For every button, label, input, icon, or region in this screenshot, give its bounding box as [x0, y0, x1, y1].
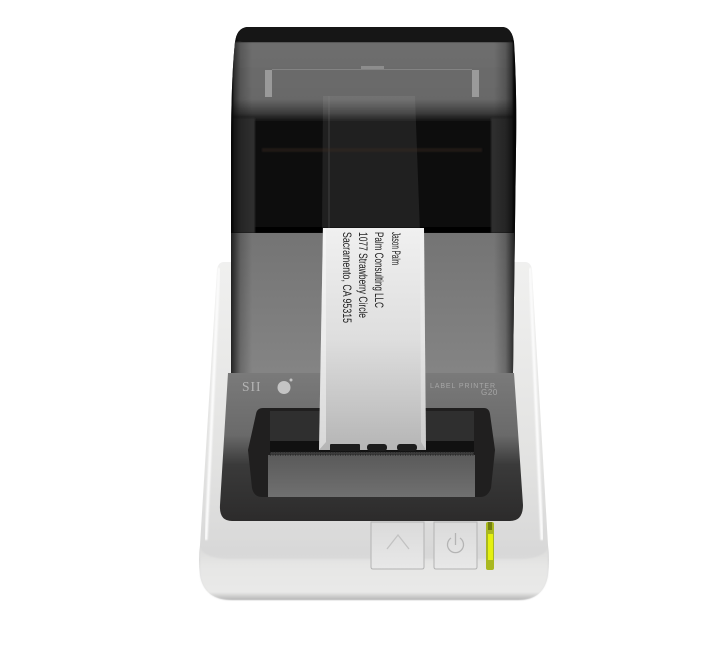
printed label: [319, 228, 426, 451]
cover upper window: [233, 42, 513, 233]
address text: 1077 Strawberry Circle: [356, 232, 370, 318]
status LED: [486, 522, 494, 570]
up button: [371, 522, 424, 569]
transparent cover: [229, 27, 517, 373]
power button: [434, 522, 477, 569]
address text: Sacramento, CA 95315: [340, 232, 354, 323]
panel model text: G20: [481, 388, 498, 397]
front panel: [220, 373, 523, 521]
address text: [340, 232, 403, 323]
address text: Palm Consulting LLC: [372, 232, 386, 308]
panel model text: [430, 383, 498, 397]
label strip seen through cover: [322, 96, 420, 233]
label printer illustration: [199, 27, 549, 601]
address text: Jason Palm: [389, 232, 403, 265]
panel brand mark: [242, 378, 292, 394]
panel model text: LABEL PRINTER: [430, 383, 496, 390]
paper exit opening: [248, 408, 495, 497]
highlight bars inside cover: [265, 66, 479, 97]
cover side shadows: [233, 118, 255, 233]
printer base: [199, 262, 549, 600]
cover lower window: [231, 233, 514, 373]
panel brand mark: SII: [242, 379, 262, 394]
label notches: [330, 444, 417, 451]
